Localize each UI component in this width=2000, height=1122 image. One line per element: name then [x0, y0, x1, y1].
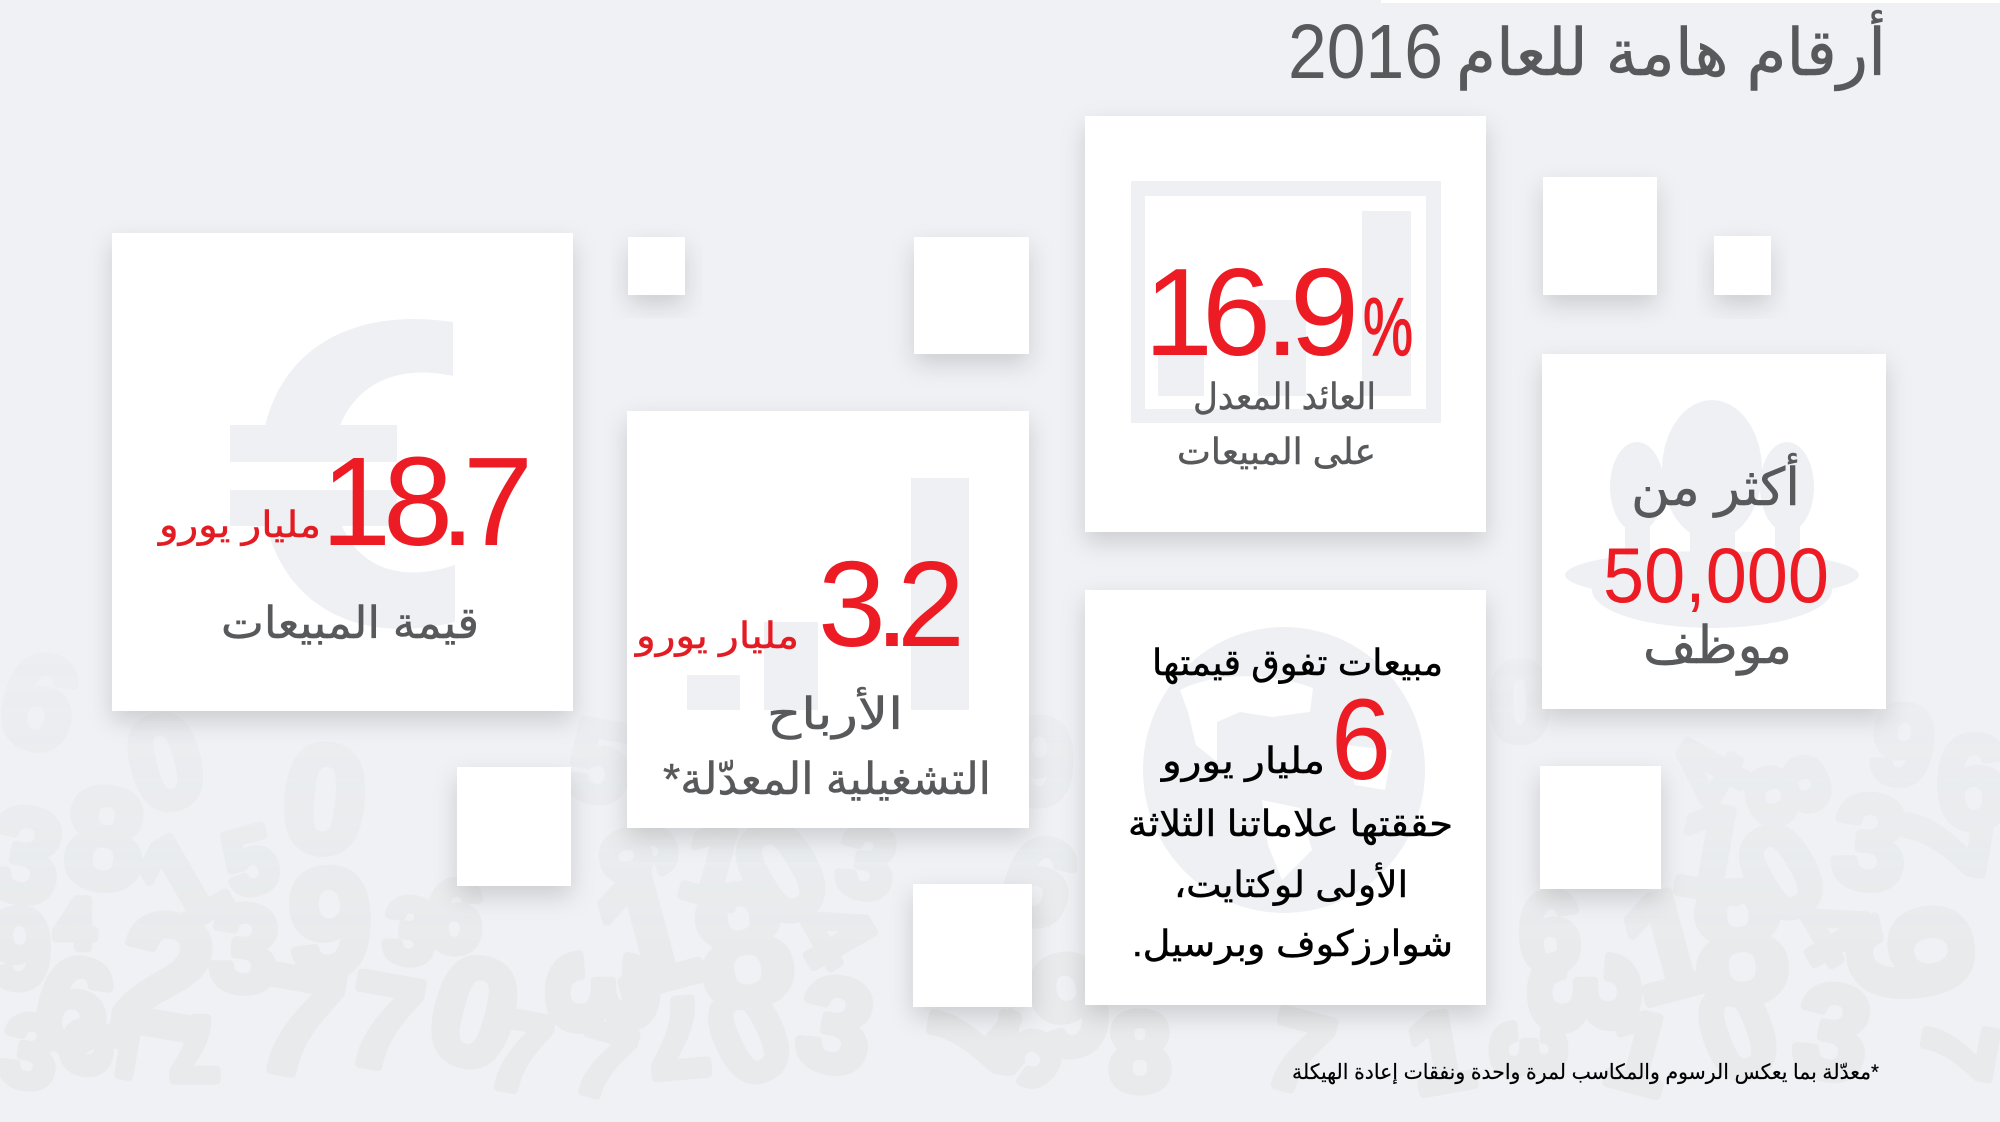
text: 1 [113, 800, 249, 963]
text: 3 [1501, 951, 1669, 1035]
text: 4 [1773, 879, 1898, 983]
value: 3.2: 3.2 [818, 536, 965, 672]
text: 3 [206, 879, 284, 1019]
text: 1 [1594, 985, 1685, 1120]
text: 3 [787, 947, 884, 1103]
text: 9 [1862, 680, 1943, 811]
text: 3 [1784, 954, 1881, 1110]
text: 9 [288, 838, 372, 1006]
label: more than: أكثر من [1631, 453, 1800, 518]
label: employee: موظف [1643, 617, 1792, 676]
text: 7 [643, 974, 715, 1101]
line 1: مبيعات تفوق قيمتها [1152, 642, 1443, 684]
text: 0 [685, 953, 812, 1116]
title: 2016 [1288, 9, 1443, 95]
text: 6 [422, 859, 487, 975]
text: 1 [669, 798, 760, 933]
text: 4 [56, 885, 95, 963]
decorative square [913, 884, 1032, 1007]
value: 18.7: 18.7 [321, 431, 533, 572]
decorative square [1714, 236, 1771, 295]
icon: euro sign [230, 319, 455, 629]
text: 5 [213, 807, 288, 917]
text: 0 [412, 920, 537, 1104]
text: 8 [1685, 844, 1796, 1042]
icon: framed bar chart [1131, 181, 1441, 423]
card: employees [1542, 354, 1886, 709]
unit: billion euro: مليار يورو [157, 504, 321, 546]
footnote: *معدّلة بما يعكس الرسوم والمكاسب لمرة واحدة ونفقات إعادة الهيكلة [1292, 1061, 1879, 1085]
card: top three brands [1085, 590, 1486, 1005]
text: 6 [985, 808, 1094, 956]
text: 6 [1018, 921, 1122, 1090]
text: 1 [1400, 987, 1481, 1118]
decorative square [457, 767, 571, 886]
text: 0 [276, 712, 374, 886]
text: 7 [563, 1001, 646, 1122]
label line 2: التشغيلية المعدّلة* [663, 755, 991, 804]
icon: people [1565, 400, 1859, 628]
decorative square [628, 237, 685, 295]
label line 2: على المبيعات [1177, 431, 1376, 472]
unit: billion euro: مليار يورو [1160, 740, 1325, 782]
decorative square [1543, 177, 1657, 295]
value: 6: 6 [1331, 676, 1391, 804]
text: 5 [38, 1013, 158, 1087]
unit: billion euro: مليار يورو [634, 615, 799, 657]
text: 8 [1109, 991, 1171, 1114]
text: 4 [772, 882, 897, 986]
line 3: الأولى لوكتايت، [1174, 862, 1408, 906]
card: adjusted return on sales [1085, 116, 1486, 532]
text: 3 [1827, 766, 1912, 918]
text: 0 [708, 784, 854, 959]
icon: bars [687, 478, 969, 710]
text: 3 [381, 880, 439, 984]
text: 0 [112, 682, 219, 842]
text: 7 [1254, 985, 1345, 1120]
text: 8 [1719, 741, 1856, 841]
line 4: شوارزكوف وبرسيل. [1132, 923, 1453, 965]
value: 16.9: 16.9 [1144, 244, 1359, 382]
card: adjusted operating profit [627, 411, 1029, 828]
text: 3 [519, 951, 687, 1035]
decorative square [914, 237, 1029, 354]
text: 3 [1472, 1022, 1584, 1078]
value: 50,000: 50,000 [1603, 531, 1829, 619]
label: sales: قيمة المبيعات [221, 599, 479, 648]
text: 6 [578, 816, 698, 890]
label line 1: الأرباح [767, 686, 903, 740]
text: 5 [963, 994, 1084, 1109]
label line 1: العائد المعدل [1193, 376, 1376, 417]
text: 0 [1713, 790, 1849, 953]
title [1288, 9, 1886, 95]
text: 1 [577, 829, 717, 1037]
text: 1 [1664, 774, 1761, 930]
text: 7 [170, 998, 220, 1098]
text: 7 [244, 932, 355, 1112]
text: 4 [1646, 722, 1771, 826]
text: 0 [1489, 641, 1551, 764]
text: 6 [1519, 871, 1581, 994]
text: 1 [1605, 853, 1730, 1037]
text: 6 [21, 925, 128, 1085]
line 2: حققتها علاماتنا الثلاثة [1128, 803, 1453, 845]
text: 7 [336, 944, 433, 1100]
text: 7 [899, 992, 1043, 1081]
text: 8 [59, 757, 151, 920]
text: 5 [559, 697, 640, 828]
card: sales value [112, 233, 573, 711]
text: 9 [1007, 695, 1073, 829]
decorative square [1540, 766, 1661, 889]
text: 8 [680, 844, 807, 1048]
title: أرقام هامة للعام [1456, 10, 1886, 91]
percent sign: % [1363, 282, 1413, 373]
text: 2 [101, 874, 228, 1078]
text: 3 [830, 802, 904, 922]
icon: globe [1143, 627, 1425, 913]
text: 0 [1679, 951, 1797, 1113]
text: 7 [479, 987, 560, 1118]
